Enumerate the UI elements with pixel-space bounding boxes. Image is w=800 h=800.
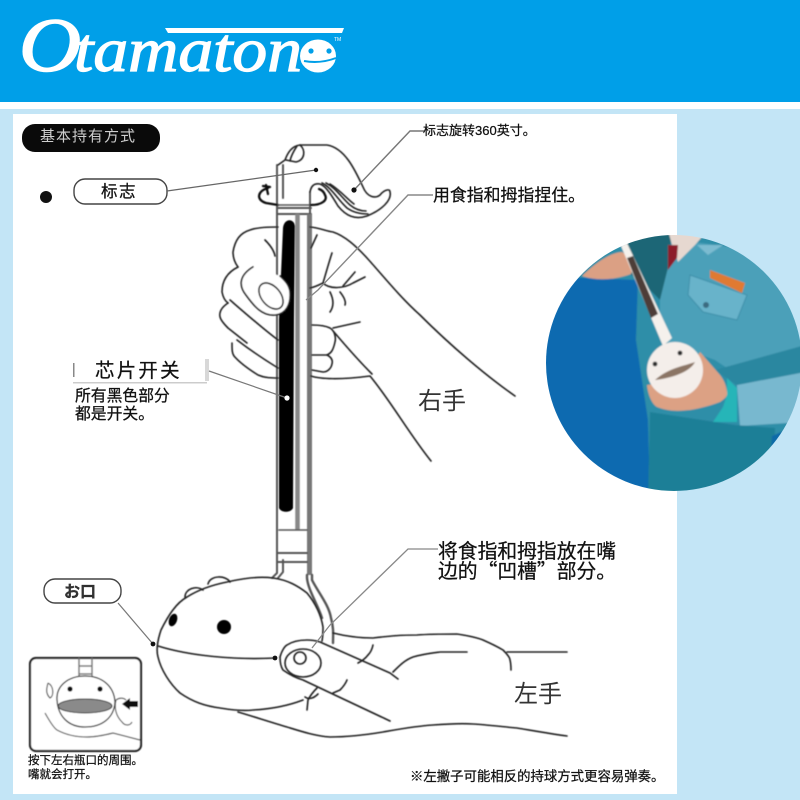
text: all black parts are switches: 都是开关。 <box>75 405 154 423</box>
logo: Otamatone: TM <box>334 37 341 43</box>
photo pocket <box>688 275 747 320</box>
logo: Otamatone: tamaton <box>74 17 302 85</box>
callout: pinch with index finger and thumb <box>306 186 585 300</box>
footnote: left-handed note: ※左撇子可能相反的持球方式更容易弹奏。 <box>410 768 664 784</box>
thumb over switch <box>241 267 290 315</box>
callout: place fingers on mouth groove <box>312 535 616 648</box>
heading pill: basic holding <box>22 124 160 152</box>
photo dark blue lower right <box>771 431 782 446</box>
callout leader: mouth <box>118 603 277 660</box>
label: logo pill <box>74 179 167 204</box>
inset: squeezing the ball opens mouth <box>30 658 141 751</box>
inset caption <box>28 753 143 781</box>
rotation arrow around neck <box>259 185 326 205</box>
photo blue backdrop <box>546 277 650 488</box>
neck of instrument <box>272 165 333 643</box>
label: chip switch: 芯片开关 <box>95 360 182 382</box>
text: all black parts are switches <box>75 387 170 423</box>
callout: logo rotates 360: 标志旋转360英寸。 <box>423 123 536 138</box>
photo lower jacket <box>648 412 775 500</box>
bullet dot <box>40 191 52 203</box>
photo ball <box>647 342 703 398</box>
callout: logo rotates 360 <box>351 123 536 193</box>
header band <box>0 0 800 109</box>
logo tail on head of instrument <box>278 145 390 218</box>
main white panel <box>13 114 677 794</box>
photo wristband <box>713 378 737 422</box>
label: right hand: 右手 <box>418 388 466 415</box>
logo: Otamatone: O <box>19 4 81 88</box>
photo shirt and tie <box>668 235 702 263</box>
callout leader: logo <box>167 168 318 191</box>
inset caption: 嘴就会打开。 <box>28 767 97 781</box>
photo instrument neck <box>621 243 672 346</box>
label: left hand: 左手 <box>514 681 562 708</box>
photo jacket light chest <box>660 242 800 368</box>
text: all black parts are switches: 所有黑色部分 <box>75 387 170 405</box>
photo sleeve <box>737 372 800 426</box>
callout: place fingers on mouth groove: 将食指和拇指放在嘴 <box>438 535 616 564</box>
instrument and hands line drawing <box>157 145 567 737</box>
photo hand upper <box>582 252 632 279</box>
left hand <box>238 633 567 737</box>
label: mouth pill: お口 <box>64 583 96 601</box>
photo orange badge <box>710 270 745 293</box>
photo lower hand <box>647 352 727 411</box>
right hand <box>220 227 515 461</box>
black chip switch strip <box>279 220 295 512</box>
photo dark chest <box>627 235 672 300</box>
callout: pinch with index finger and thumb: 用食指和拇指捏住。 <box>433 186 585 205</box>
ball head <box>157 577 323 710</box>
inset caption: 按下左右瓶口的周围。 <box>28 753 143 767</box>
logo: Otamatone <box>19 4 344 88</box>
callout: place fingers on mouth groove: 边的“凹槽”部分。 <box>438 555 616 584</box>
callout leader: chip switch <box>209 371 290 401</box>
label: mouth pill <box>44 579 121 603</box>
photo: person holding Otamatone <box>540 228 800 500</box>
heading pill: basic holding: 基本持有方式 <box>40 128 136 145</box>
label: logo pill: 标志 <box>101 182 137 201</box>
label: chip switch <box>73 358 209 384</box>
